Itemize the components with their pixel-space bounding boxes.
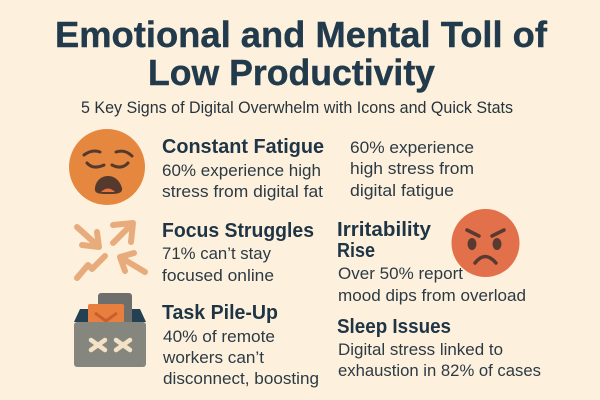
panel: task pile-up: workers can’t [162, 348, 264, 367]
subtitle: 5 Key Signs of Digital Overwhelm with Icons and Quick Stats [81, 99, 513, 117]
panel: task pile-up: Task Pile-Up [162, 302, 278, 324]
panel: focus struggles [162, 220, 314, 285]
panel: sleep issues: exhaustion in 82% of cases [338, 361, 541, 380]
panel: task pile-up: 40% of remote [163, 327, 275, 346]
text block: repeated fatigue stat: high stress from [350, 159, 474, 178]
text block: repeated fatigue stat [350, 138, 474, 200]
panel: task pile-up [162, 302, 319, 388]
panel: constant fatigue: 60% experience high [162, 161, 321, 180]
panel: sleep issues [337, 316, 541, 380]
panel: irritability rise: Over 50% report [338, 264, 463, 283]
panel: focus struggles: 71% can’t stay [162, 244, 271, 263]
title: Emotional and Mental Toll of [55, 14, 548, 55]
panel: task pile-up: disconnect, boosting [163, 369, 319, 388]
panel: irritability rise: Rise [337, 240, 375, 262]
panel: constant fatigue: Constant Fatigue [162, 136, 324, 158]
panel: constant fatigue [162, 136, 324, 201]
panel: irritability rise [337, 219, 526, 305]
panel: irritability rise: Irritability [337, 219, 432, 241]
panel: focus struggles: focused online [162, 266, 274, 285]
panel: focus struggles: Focus Struggles [162, 220, 314, 242]
title [55, 14, 548, 93]
panel: irritability rise: mood dips from overload [338, 286, 526, 305]
icon: tired face [69, 129, 145, 205]
title: Low Productivity [148, 52, 435, 93]
icon: angry face [452, 209, 520, 277]
icon: scattered arrows [77, 223, 145, 278]
icon: overflowing inbox box [74, 293, 146, 367]
text block: repeated fatigue stat: 60% experience [350, 138, 474, 157]
panel: constant fatigue: stress from digital fat [162, 182, 323, 201]
text block: repeated fatigue stat: digital fatigue [350, 181, 454, 200]
panel: sleep issues: Digital stress linked to [338, 340, 503, 359]
panel: sleep issues: Sleep Issues [337, 316, 451, 338]
